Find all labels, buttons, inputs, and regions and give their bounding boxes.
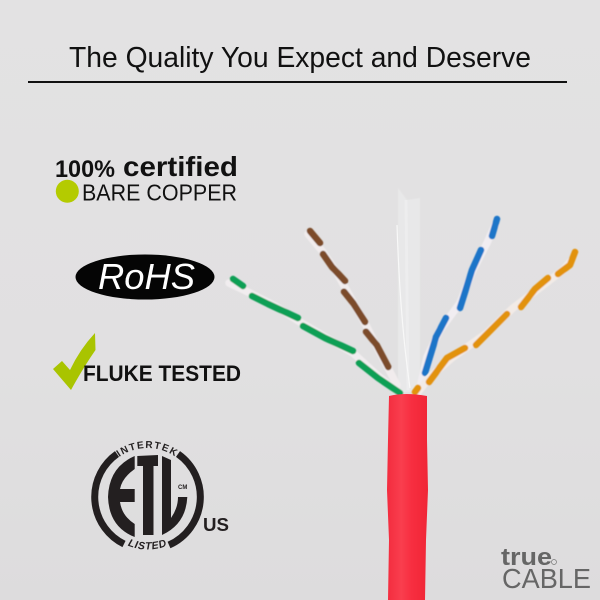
badge: Fluke tested [53, 333, 241, 390]
logo: true CABLE [501, 544, 591, 594]
badge: RoHS [76, 254, 214, 300]
ETL outer ring [95, 454, 200, 545]
badge: 100% certified bare copper: 100% [55, 156, 115, 183]
badge: 100% certified bare copper [55, 151, 238, 206]
badge: Fluke tested: FLUKE TESTED [83, 361, 241, 386]
ETL letter V [162, 456, 187, 535]
badge: 100% certified bare copper: BARE COPPER [82, 180, 237, 206]
badge: 100% certified bare copper: certified [123, 151, 238, 182]
ETL CM mark: CM [178, 485, 187, 491]
ETL US mark: US [203, 515, 229, 535]
badge: RoHS: RoHS [98, 256, 195, 297]
wire pair: blue [420, 219, 497, 388]
wire pair: orange [415, 252, 575, 392]
ETL letter E [108, 456, 135, 537]
ETL top text: INTERTEK [116, 441, 178, 457]
ETL bottom text: LISTED [128, 539, 166, 550]
title: The Quality You Expect and Deserve [69, 42, 531, 74]
cable [229, 188, 575, 600]
clear filler [397, 188, 420, 392]
red jacket [387, 394, 428, 600]
title underline [28, 81, 567, 83]
ETL letter T [137, 455, 158, 535]
logo: true CABLE: true [501, 544, 552, 571]
wire pair: green [229, 279, 400, 393]
wire pair: brown [308, 231, 397, 385]
logo: true CABLE: CABLE [502, 563, 591, 594]
badge: ETL listed [91, 441, 229, 550]
